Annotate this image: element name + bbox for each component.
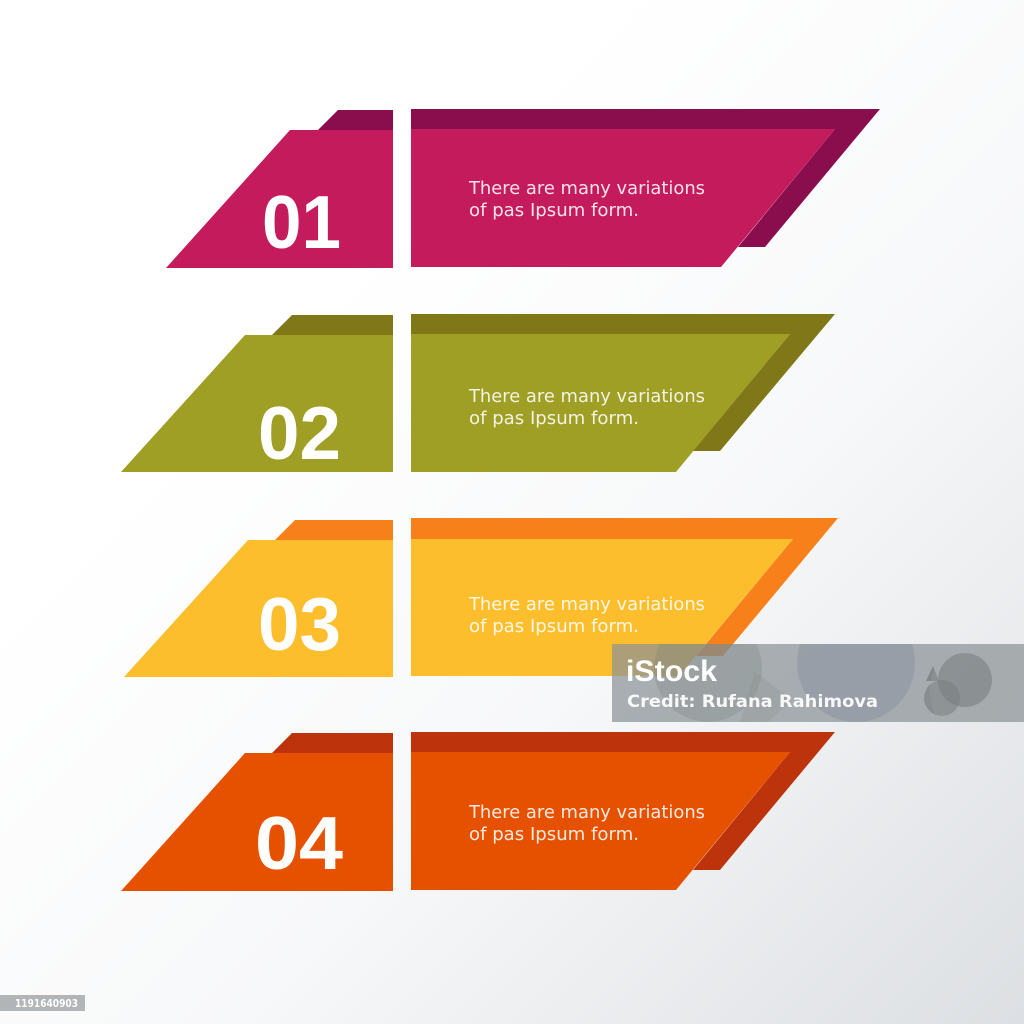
left tab 04 (121, 753, 393, 891)
number 03: 03 (258, 582, 341, 666)
text 01: of pas Ipsum form. (469, 201, 639, 221)
left tab 03 (124, 540, 393, 677)
panel: step 03 (124, 518, 838, 677)
panel: step 02 (121, 314, 835, 475)
credit text: Credit: Rufana Rahimova (627, 692, 878, 712)
left tab shadow 04 (272, 733, 393, 753)
number 01: 01 (262, 180, 341, 264)
right panel 02 (411, 334, 790, 472)
image id tag (0, 995, 85, 1011)
text 04: There are many variations (468, 803, 705, 823)
text 04: of pas Ipsum form. (469, 825, 639, 845)
text 01: There are many variations (468, 179, 705, 199)
right panel shadow 02 (411, 314, 835, 451)
panel: step 04 (121, 732, 835, 891)
right panel 01 (411, 129, 835, 267)
text 03: of pas Ipsum form. (469, 617, 639, 637)
watermark banner (612, 644, 1024, 722)
left tab shadow 03 (275, 520, 393, 540)
left tab 01 (166, 130, 393, 268)
right panel shadow 04 (411, 732, 835, 870)
image id tag: 1191640903 (15, 998, 78, 1010)
text 02: of pas Ipsum form. (469, 409, 639, 429)
left tab shadow 01 (318, 110, 393, 130)
right panel 04 (411, 752, 790, 890)
right panel 03 (411, 539, 793, 676)
iStock logo: iStock (626, 655, 717, 688)
text 02: There are many variations (468, 387, 705, 407)
left tab shadow 02 (272, 315, 393, 335)
right panel shadow 01 (411, 109, 880, 247)
number 04: 04 (255, 801, 343, 885)
number 02: 02 (258, 391, 341, 475)
panel: step 01 (166, 109, 880, 268)
text 03: There are many variations (468, 595, 705, 615)
left tab 02 (121, 335, 393, 472)
right panel shadow 03 (411, 518, 838, 656)
